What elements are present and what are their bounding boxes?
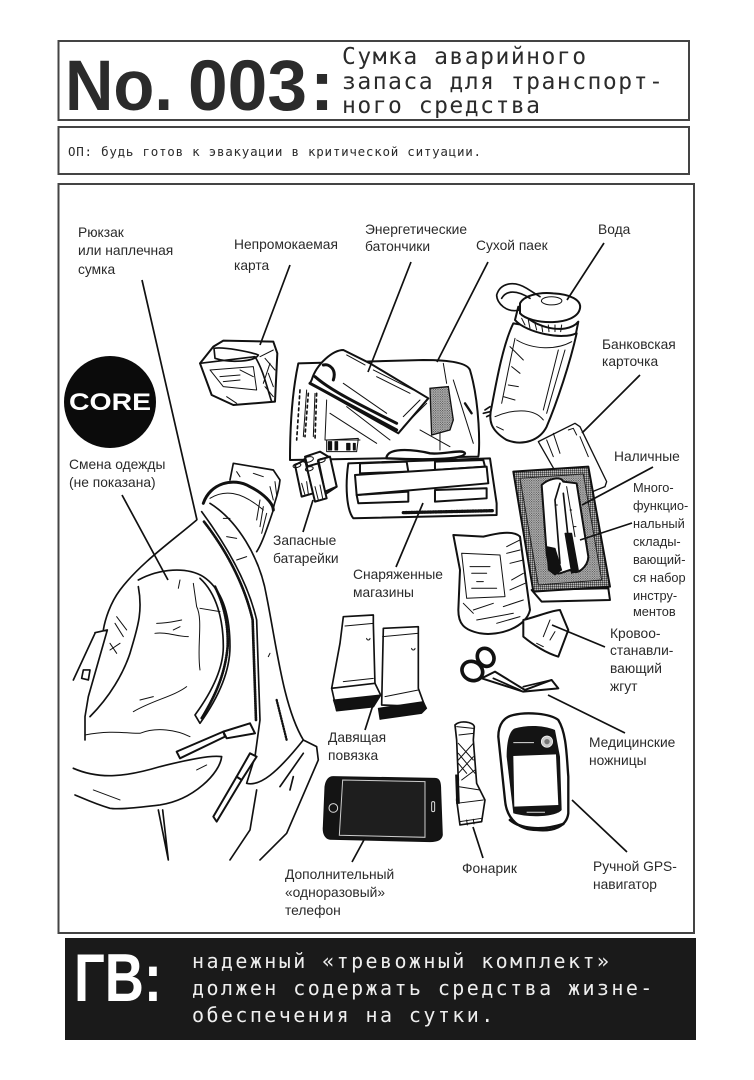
label: waterproof map: карта — [234, 258, 270, 273]
label: multi-tool: склады- — [633, 534, 681, 549]
icon: multi-tool — [542, 478, 588, 575]
label: spare phone: телефон — [285, 903, 341, 918]
CORE logo — [64, 356, 156, 448]
main illustration panel — [58, 184, 694, 933]
title text: ного средства — [342, 93, 542, 119]
label: multi-tool: ментов — [633, 604, 676, 619]
icon: backpack — [73, 463, 318, 860]
label: spare phone: Дополнительный — [285, 867, 394, 882]
icon: medical scissors — [458, 645, 558, 692]
label: GPS navigator: навигатор — [593, 877, 657, 892]
label: multi-tool: инстру- — [633, 588, 677, 603]
label: bank card: карточка — [602, 354, 658, 369]
icon: waterproof map — [200, 341, 277, 405]
icon: energy bars — [310, 350, 428, 433]
label: spare batteries: Запасные — [273, 533, 337, 548]
title number — [65, 47, 334, 126]
objective panel — [58, 127, 689, 174]
label: water: Вода — [598, 222, 631, 237]
label: dry ration: Сухой паек — [476, 238, 549, 253]
label: tourniquet: станавли- — [610, 643, 673, 658]
label: waterproof map: Непромокаемая — [234, 237, 338, 252]
label: pressure bandage: Давящая — [328, 730, 386, 745]
icon: burner phone — [323, 777, 442, 842]
label: backpack: сумка — [78, 262, 115, 277]
label: bank card: Банковская — [602, 337, 676, 352]
label: loaded magazines: магазины — [353, 585, 414, 600]
icon: water bottle — [483, 284, 580, 443]
label: multi-tool: вающий- — [633, 552, 685, 567]
label: tourniquet: Кровоо- — [610, 626, 660, 641]
label: loaded magazines: Снаряженные — [353, 567, 443, 582]
label: backpack: Рюкзак — [78, 225, 125, 240]
bottom line heading: ГВ: — [74, 940, 162, 1016]
bottom line text: надежный «тревожный комплект» — [192, 949, 611, 973]
icon: pressure bandage pack — [453, 533, 530, 634]
label: cash: Наличные — [614, 449, 680, 464]
icon: GPS navigator — [498, 713, 568, 830]
bottom line text: должен содержать средства жизне- — [192, 976, 655, 1000]
label: medical scissors: Медицинские — [589, 735, 676, 750]
label: multi-tool: ся набор — [633, 570, 686, 585]
label: multi-tool: функцио- — [633, 498, 688, 513]
icon: bank card — [538, 423, 607, 500]
title text — [342, 44, 664, 119]
title number: No. — [65, 47, 173, 126]
label: spare batteries: батарейки — [273, 551, 339, 566]
title text: запаса для транспорт- — [342, 69, 664, 95]
label: energy bars: Энергетические — [365, 222, 467, 237]
icon: loaded magazines pouch — [347, 450, 497, 518]
leader lines — [122, 243, 653, 862]
label: change of clothes: Смена одежды — [69, 457, 165, 472]
bottom line panel — [65, 938, 696, 1040]
CORE logo: CORE — [69, 389, 151, 416]
label: spare phone: «одноразовый» — [285, 885, 385, 900]
label: backpack: или наплечная — [78, 243, 173, 258]
label: GPS navigator: Ручной GPS- — [593, 859, 677, 874]
bottom line text: обеспечения на сутки. — [192, 1003, 496, 1027]
label: energy bars: батончики — [365, 239, 430, 254]
icon: dry ration package — [290, 360, 479, 460]
bottom line text — [192, 949, 655, 1027]
icon: spare batteries — [293, 452, 337, 502]
label: multi-tool: нальный — [633, 516, 685, 531]
icon: flashlight — [455, 722, 485, 825]
label: multi-tool: Много- — [633, 480, 674, 495]
header panel — [58, 41, 689, 126]
title text: Сумка аварийного — [342, 44, 588, 70]
label: pressure bandage: повязка — [328, 748, 378, 763]
label: change of clothes: (не показана) — [69, 475, 156, 490]
title number: 003 — [188, 47, 307, 126]
title number: : — [310, 47, 334, 126]
icon: tourniquet — [523, 610, 568, 657]
icon: pistol magazines — [332, 615, 427, 719]
icon: cash — [513, 467, 610, 602]
label: medical scissors: ножницы — [589, 753, 647, 768]
label: tourniquet: вающий — [610, 661, 662, 676]
objective text: ОП: будь готов к эвакуации в критической ситуации. — [68, 144, 482, 159]
label: flashlight: Фонарик — [462, 861, 518, 876]
label: tourniquet: жгут — [610, 679, 638, 694]
